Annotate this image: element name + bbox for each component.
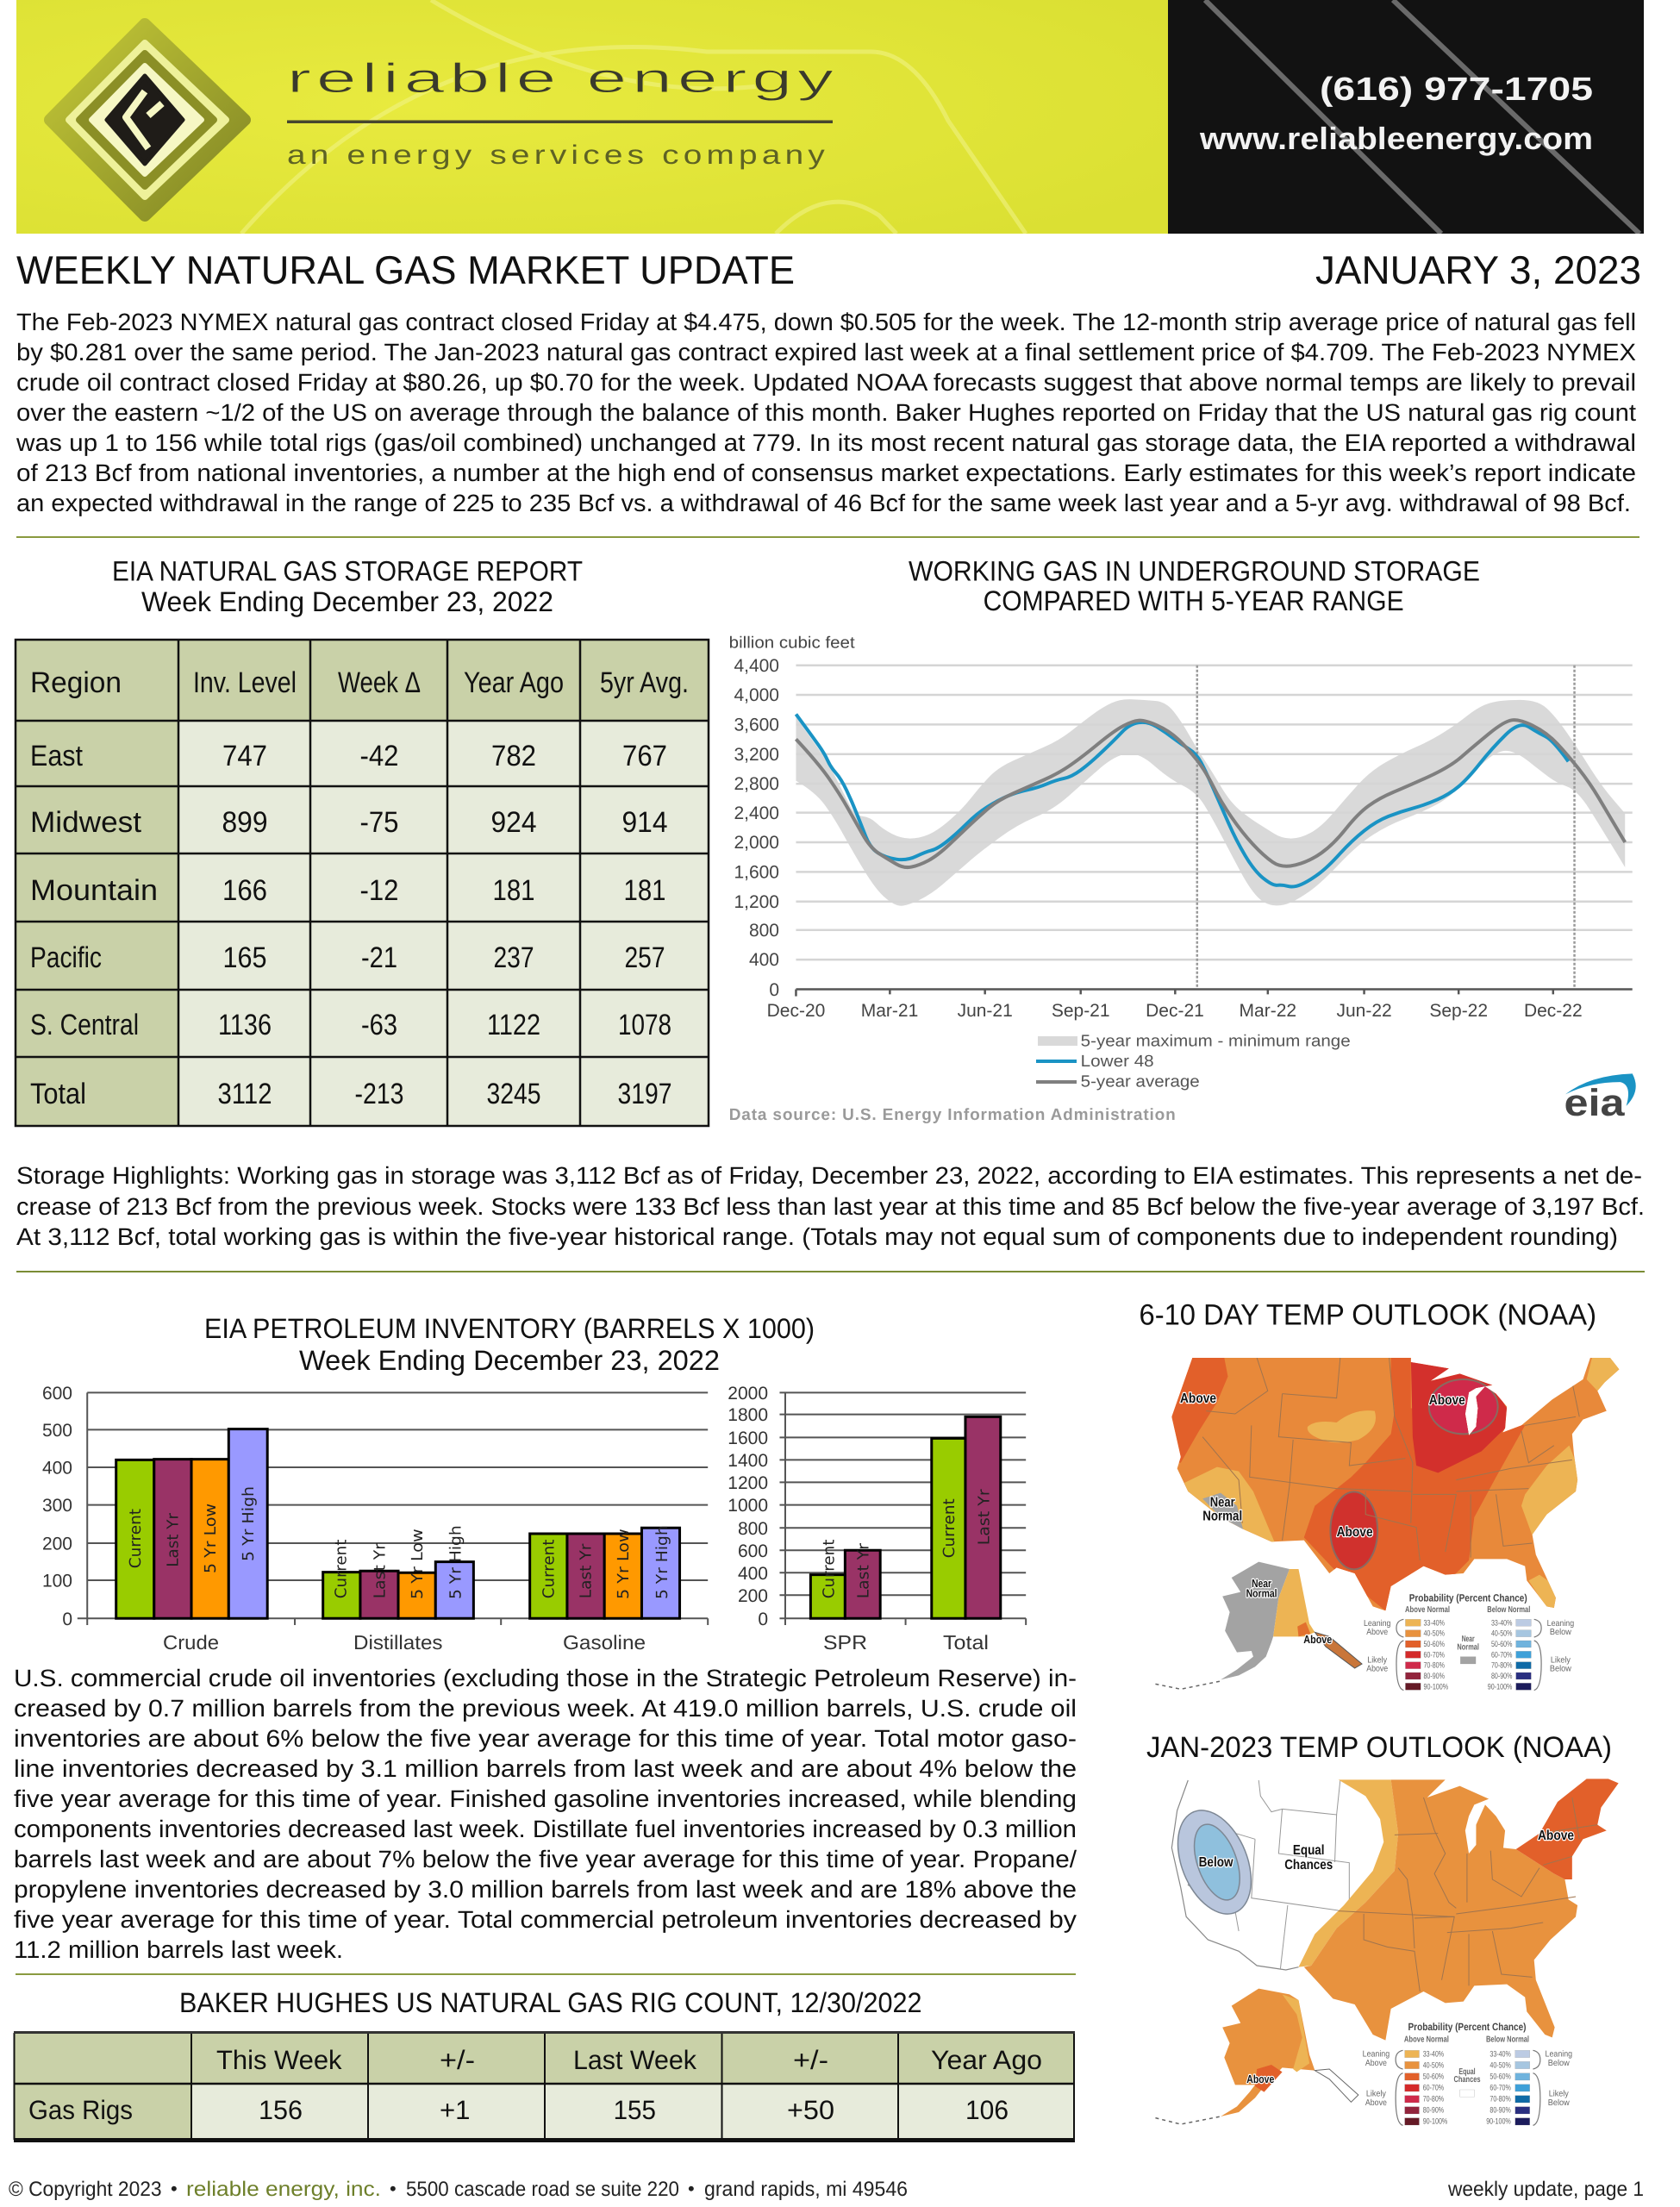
storage table: Week Δ	[338, 666, 421, 699]
y axis labels: 0	[758, 1610, 768, 1629]
y axis labels: 400	[738, 1564, 768, 1584]
US outline and probability regions	[1155, 1779, 1619, 2124]
x axis labels: Mar-22	[1240, 1001, 1296, 1021]
heading: working gas chart: COMPARED WITH 5-YEAR RANGE	[984, 585, 1404, 616]
heading: petroleum inventory: Week Ending December 23, 2022	[299, 1345, 720, 1376]
rig count table: Year Ago	[931, 2045, 1042, 2075]
map legend: 40-50%	[1491, 1629, 1513, 1639]
map legend: Below	[1548, 2059, 1571, 2068]
y axis labels: 600	[738, 1541, 768, 1561]
storage table: 5yr Avg.	[600, 666, 689, 699]
footer: reliable energy, inc.	[186, 2178, 381, 2201]
map legend: 80-90%	[1424, 1672, 1445, 1681]
map region labels: Equal	[1293, 1843, 1324, 1858]
map legend: 90-100%	[1424, 1682, 1449, 1691]
x axis labels: Jun-22	[1336, 1001, 1392, 1021]
storage table: S. Central	[30, 1009, 139, 1041]
black contact panel	[1168, 0, 1644, 234]
phone number: (616) 977-1705	[1320, 72, 1593, 108]
icon: eia logo: eia	[1564, 1082, 1625, 1124]
map legend: Leaning	[1546, 2049, 1572, 2059]
chart legend	[1036, 1033, 1351, 1091]
map legend: 70-80%	[1424, 1661, 1445, 1671]
map legend: 33-40%	[1490, 2049, 1511, 2059]
map legend: Chances	[1453, 2075, 1481, 2085]
y axis labels: 200	[42, 1535, 72, 1554]
y axis labels: 2,800	[734, 774, 779, 794]
heading: storage report	[112, 555, 583, 617]
map legend: 60-70%	[1424, 1650, 1445, 1660]
map legend: 80-90%	[1490, 2106, 1511, 2116]
y axis labels: 800	[738, 1519, 768, 1539]
map legend: Above Normal	[1405, 1605, 1450, 1615]
storage table: 1078	[618, 1009, 671, 1041]
footer	[9, 2178, 1644, 2201]
date: JANUARY 3, 2023	[1315, 247, 1641, 292]
petroleum commentary text: components inventories decreased last week. Distillate fuel inventories increased by 0.3 million	[14, 1816, 1077, 1842]
rig count table: +1	[440, 2095, 471, 2125]
x axis labels: Sep-21	[1052, 1001, 1110, 1021]
market summary text: an expected withdrawal in the range of 225 to 235 Bcf vs. a withdrawal of 46 Bcf for the same week last year and a 5-yr avg. withdrawal of 98 Bcf.	[16, 490, 1631, 516]
y axis labels: 1400	[728, 1451, 768, 1471]
lime logo panel	[16, 0, 1168, 234]
map legend: Above	[1366, 1665, 1389, 1674]
map legend: Below	[1548, 2098, 1571, 2108]
map region labels: Below	[1199, 1855, 1233, 1870]
market summary text: over the eastern ~1/2 of the US on average through the balance of this month. Baker Hughes reported on Friday that the US natural gas rig count	[16, 399, 1636, 426]
petroleum commentary text: creased by 0.7 million barrels from the previous week. At 419.0 million barrels, U.S. crude oil	[14, 1695, 1077, 1722]
map: 6-10 day temperature outlook	[1155, 1351, 1627, 1691]
bar labels	[127, 1486, 994, 1599]
storage table	[16, 640, 709, 1126]
footer: 5500 cascade road se suite 220	[406, 2178, 679, 2201]
grid and axes	[78, 1392, 1026, 1625]
market summary text: by $0.281 over the same period. The Jan-2023 natural gas contract expired last week at a final settlement price of $4.709. The Feb-2023 NYMEX	[16, 339, 1636, 366]
rig count table: Last Week	[573, 2045, 696, 2075]
icon: reliable energy diamond logo	[50, 24, 245, 216]
map legend: Likely	[1366, 2089, 1386, 2098]
map legend: Equal	[1458, 2067, 1476, 2077]
logo divider	[287, 121, 833, 123]
map legend: Above Normal	[1404, 2035, 1449, 2045]
storage table: 899	[222, 806, 267, 839]
storage table: -213	[355, 1078, 403, 1110]
storage table: 924	[491, 806, 536, 839]
map legend: 70-80%	[1491, 1661, 1513, 1671]
Alaska	[1221, 1989, 1315, 2116]
y axis labels: 200	[738, 1586, 768, 1606]
y axis labels: 0	[62, 1610, 72, 1629]
map legend: 60-70%	[1490, 2084, 1511, 2093]
chart legend: Lower 48	[1081, 1053, 1154, 1071]
rig count table: 155	[614, 2095, 656, 2125]
heading: January outlook: JAN-2023 TEMP OUTLOOK (NOAA)	[1146, 1731, 1612, 1764]
bar chart: petroleum inventory	[42, 1384, 1026, 1654]
map legend	[1364, 1591, 1574, 1691]
storage table: Midwest	[30, 806, 142, 839]
map legend: 50-60%	[1490, 2073, 1511, 2082]
map legend: Near	[1462, 1635, 1475, 1644]
storage table: 1122	[487, 1009, 540, 1041]
map legend: 50-60%	[1423, 2073, 1445, 2082]
bars	[116, 1416, 1001, 1618]
storage highlights text	[16, 1162, 1645, 1250]
bar labels: Current	[127, 1509, 145, 1568]
map region labels: Near	[1252, 1577, 1271, 1590]
heading: storage report: EIA NATURAL GAS STORAGE REPORT	[112, 555, 583, 586]
storage table: -12	[360, 874, 398, 907]
heading: working gas chart: WORKING GAS IN UNDERGROUND STORAGE	[909, 555, 1480, 586]
y axis labels: 1200	[728, 1473, 768, 1493]
storage table: 165	[222, 941, 267, 974]
map legend: 70-80%	[1490, 2095, 1511, 2104]
bar labels: Last Yr	[854, 1542, 872, 1598]
y axis labels: 1800	[728, 1405, 768, 1425]
map legend: Leaning	[1363, 2049, 1390, 2059]
map legend: 80-90%	[1491, 1672, 1513, 1681]
map legend: Leaning	[1547, 1619, 1574, 1629]
x axis labels: Mar-21	[861, 1001, 918, 1021]
map legend: 50-60%	[1424, 1640, 1445, 1649]
y axis labels: 0	[769, 980, 779, 1000]
storage table: 1136	[218, 1009, 272, 1041]
y axis labels: 400	[749, 950, 779, 970]
map legend: Likely	[1551, 1656, 1571, 1666]
storage table: Inv. Level	[193, 666, 297, 699]
y axis labels: 4,400	[734, 656, 779, 676]
map region labels: Chances	[1284, 1858, 1333, 1873]
map legend: Probability (Percent Chance)	[1408, 2021, 1526, 2033]
x axis labels: Dec-20	[767, 1001, 825, 1021]
category labels: Gasoline	[563, 1631, 646, 1654]
map region labels: Above	[1429, 1393, 1465, 1408]
heading: rig count: BAKER HUGHES US NATURAL GAS RIG COUNT, 12/30/2022	[179, 1987, 922, 2018]
map region labels	[1180, 1391, 1465, 1646]
category labels: SPR	[823, 1631, 867, 1654]
category labels: Crude	[163, 1631, 219, 1654]
bar labels: Current	[333, 1540, 351, 1598]
petroleum commentary text: line inventories decreased by 3.1 million barrels from last week and are about 4% below the	[14, 1755, 1077, 1782]
bar labels: Current	[820, 1540, 838, 1598]
map legend: 40-50%	[1423, 2060, 1445, 2070]
bar labels: Current	[540, 1540, 559, 1598]
map region labels: Above	[1180, 1391, 1216, 1406]
x axis labels: Jun-21	[958, 1001, 1013, 1021]
Alaska	[1221, 1562, 1290, 1679]
storage table: Region	[30, 666, 122, 699]
rig count table: 106	[965, 2095, 1009, 2125]
US outline and probability regions	[1155, 1351, 1627, 1689]
website: www.reliableenergy.com	[1199, 121, 1593, 156]
y axis labels: 1000	[728, 1496, 768, 1516]
x axis labels	[767, 1001, 1583, 1021]
map legend: 50-60%	[1491, 1640, 1513, 1649]
storage table: 747	[222, 740, 267, 772]
map legend: 33-40%	[1424, 1618, 1445, 1628]
y axis labels: 3,200	[734, 745, 779, 765]
data source: Data source: U.S. Energy Information Administration	[729, 1106, 1176, 1124]
heading: petroleum inventory	[204, 1313, 815, 1376]
map legend: Below Normal	[1486, 2035, 1529, 2045]
market summary text: The Feb-2023 NYMEX natural gas contract closed Friday at $4.475, down $0.505 for the week. The 12-month strip average price of natural gas fell	[16, 309, 1636, 335]
header banner	[16, 0, 1644, 234]
company tagline: an energy services company	[287, 140, 825, 170]
map legend: Below	[1550, 1628, 1572, 1637]
map legend: Below	[1550, 1665, 1572, 1674]
footer: weekly update, page 1	[1447, 2178, 1644, 2201]
storage table: 181	[624, 874, 665, 907]
x axis labels: Dec-22	[1524, 1001, 1583, 1021]
y axis labels: 500	[42, 1421, 72, 1441]
heading: working gas chart	[909, 555, 1480, 616]
y axis labels: 4,000	[734, 685, 779, 705]
category labels: Total	[943, 1631, 989, 1654]
petroleum commentary text	[14, 1665, 1077, 1963]
footer: •	[171, 2178, 178, 2199]
petroleum commentary text: five year average for this time of year. Total commercial petroleum inventories decreased by	[14, 1906, 1077, 1933]
y axis labels: 3,600	[734, 716, 779, 735]
chart legend: 5-year average	[1081, 1072, 1200, 1091]
map region labels: Normal	[1202, 1509, 1242, 1523]
rig count table	[14, 2031, 1075, 2142]
chart unit label: billion cubic feet	[729, 635, 855, 653]
storage table: 914	[622, 806, 667, 839]
y axis labels: 100	[42, 1571, 72, 1591]
map legend: 90-100%	[1423, 2117, 1448, 2127]
map legend: 90-100%	[1486, 2117, 1511, 2127]
category labels	[163, 1631, 989, 1654]
map legend: Normal	[1457, 1642, 1479, 1652]
storage table: Pacific	[30, 941, 102, 974]
footer: grand rapids, mi 49546	[704, 2178, 908, 2201]
map region labels: Near	[1210, 1496, 1235, 1510]
bar labels: Last Yr	[371, 1542, 390, 1598]
storage table: -75	[360, 806, 398, 839]
y axis labels	[42, 1384, 768, 1629]
y axis labels: 400	[42, 1459, 72, 1478]
market summary text: of 213 Bcf from national inventories, a number at the high end of consensus market expectations. Early estimates for this week’s report indicate	[16, 460, 1636, 486]
map legend: Leaning	[1364, 1619, 1390, 1629]
storage table: 3197	[617, 1078, 672, 1110]
storage table: -63	[361, 1009, 397, 1041]
storage highlights text: Storage Highlights: Working gas in storage was 3,112 Bcf as of Friday, December 23, 2022, according to EIA estimates. This represents a net de-	[16, 1162, 1642, 1189]
map legend: Probability (Percent Chance)	[1409, 1591, 1527, 1604]
map legend: 33-40%	[1423, 2049, 1445, 2059]
heading: storage report: Week Ending December 23, 2022	[141, 586, 553, 617]
bar labels: Last Yr	[578, 1543, 596, 1598]
bar labels: Last Yr	[164, 1512, 183, 1567]
storage table: 3245	[486, 1078, 541, 1110]
storage table: East	[30, 740, 83, 772]
petroleum commentary text: U.S. commercial crude oil inventories (excluding those in the Strategic Petroleum Reserve) in-	[14, 1665, 1077, 1691]
map legend: Above	[1365, 2059, 1387, 2068]
y axis labels: 600	[42, 1384, 72, 1404]
y axis labels: 300	[42, 1496, 72, 1516]
storage highlights text: crease of 213 Bcf from the previous week. Stocks were 133 Bcf less than last year at this time and 85 Bcf below the five-year average of 3,197 Bcf.	[16, 1193, 1645, 1220]
market summary text	[16, 309, 1636, 516]
chart legend: 5-year maximum - minimum range	[1081, 1033, 1351, 1051]
map legend: Above	[1366, 1628, 1389, 1637]
map legend: 70-80%	[1423, 2095, 1445, 2104]
map legend: 40-50%	[1424, 1629, 1445, 1639]
map legend: 90-100%	[1488, 1682, 1513, 1691]
company name: reliable energy	[287, 56, 834, 102]
storage table: 767	[622, 740, 667, 772]
bar labels: 5 Yr High	[447, 1525, 465, 1599]
y axis labels: 1,200	[734, 892, 779, 912]
storage table: -21	[361, 941, 397, 974]
bar labels: 5 Yr High	[653, 1525, 671, 1599]
footer: •	[390, 2178, 397, 2199]
x axis labels: Dec-21	[1146, 1001, 1204, 1021]
map region labels: Above	[1303, 1633, 1332, 1646]
rig count table: +50	[787, 2095, 834, 2125]
map legend: 60-70%	[1423, 2084, 1445, 2093]
market summary text: was up 1 to 156 while total rigs (gas/oil combined) unchanged at 779. In its most recent natural gas storage data, the EIA reported a withdrawal	[16, 429, 1636, 456]
category labels: Distillates	[353, 1631, 443, 1654]
map legend: Likely	[1367, 1656, 1387, 1666]
map legend: 33-40%	[1491, 1618, 1513, 1628]
map legend: 80-90%	[1423, 2106, 1445, 2116]
y axis labels: 2,400	[734, 803, 779, 823]
rig count table: +/-	[793, 2045, 828, 2075]
line chart: working gas in underground storage	[729, 635, 1636, 1124]
bar labels: 5 Yr Low	[615, 1529, 633, 1599]
map legend: Above	[1365, 2098, 1387, 2108]
map region labels: Normal	[1246, 1587, 1277, 1600]
bar labels: 5 Yr Low	[409, 1529, 427, 1599]
storage table: Mountain	[30, 874, 158, 907]
map region labels: Above	[1337, 1525, 1373, 1540]
rig count table: 156	[259, 2095, 303, 2125]
storage table: 166	[222, 874, 267, 907]
bar labels: Current	[940, 1498, 959, 1558]
storage table: 257	[624, 941, 665, 974]
y axis labels: 800	[749, 921, 779, 941]
petroleum commentary text: propylene inventories decreased by 3.0 million barrels from last week and are 18% above the	[14, 1876, 1077, 1903]
map region labels: Above	[1246, 2073, 1274, 2085]
storage table: 237	[493, 941, 534, 974]
storage table: -42	[360, 740, 398, 772]
storage table: Total	[30, 1078, 86, 1110]
rig count table: This Week	[216, 2045, 342, 2075]
y axis labels	[734, 656, 779, 1000]
storage table: 782	[491, 740, 536, 772]
bar labels: Last Yr	[976, 1489, 994, 1545]
map legend	[1363, 2021, 1572, 2127]
icon: eia logo	[1564, 1073, 1636, 1124]
map region labels: Above	[1538, 1829, 1574, 1843]
bar labels: 5 Yr High	[240, 1486, 258, 1561]
heading: 6-10 day outlook: 6-10 DAY TEMP OUTLOOK (NOAA)	[1140, 1299, 1596, 1332]
map legend: Below Normal	[1487, 1605, 1530, 1615]
y axis labels: 2000	[728, 1384, 768, 1404]
storage table: Year Ago	[464, 666, 564, 699]
footer: © Copyright 2023	[9, 2178, 162, 2201]
bar labels: 5 Yr Low	[202, 1504, 220, 1573]
rig count table: Gas Rigs	[28, 2095, 133, 2125]
y axis labels: 1,600	[734, 862, 779, 883]
petroleum commentary text: inventories are about 6% below the five year average for this time of year. Total motor gaso-	[14, 1725, 1077, 1752]
map legend: Likely	[1549, 2089, 1569, 2098]
map legend: 40-50%	[1490, 2060, 1511, 2070]
rig count table: +/-	[440, 2045, 475, 2075]
map: January 2023 temperature outlook	[1155, 1779, 1619, 2127]
title: WEEKLY NATURAL GAS MARKET UPDATE	[16, 247, 795, 292]
petroleum commentary text: five year average for this time of year. Finished gasoline inventories increased, while blending	[14, 1785, 1077, 1812]
storage highlights text: At 3,112 Bcf, total working gas is within the five-year historical range. (Totals may not equal sum of components due to independent rounding)	[16, 1223, 1618, 1250]
storage table: 3112	[217, 1078, 272, 1110]
storage table: 181	[493, 874, 534, 907]
chart plot	[796, 666, 1633, 997]
map region labels	[1199, 1829, 1574, 2085]
footer: •	[688, 2178, 695, 2199]
map legend: 60-70%	[1491, 1650, 1513, 1660]
y axis labels: 2,000	[734, 833, 779, 853]
heading: petroleum inventory: EIA PETROLEUM INVENTORY (BARRELS X 1000)	[204, 1313, 815, 1344]
x axis labels: Sep-22	[1429, 1001, 1488, 1021]
petroleum commentary text: barrels last week and are about 7% below the five year average for this time of year. Propane/	[14, 1846, 1077, 1873]
y axis labels: 1600	[728, 1429, 768, 1448]
market summary text: crude oil contract closed Friday at $80.26, up $0.70 for the week. Updated NOAA forecasts suggest that above normal temps are likely to prevail	[16, 369, 1636, 396]
petroleum commentary text: 11.2 million barrels last week.	[14, 1936, 343, 1963]
